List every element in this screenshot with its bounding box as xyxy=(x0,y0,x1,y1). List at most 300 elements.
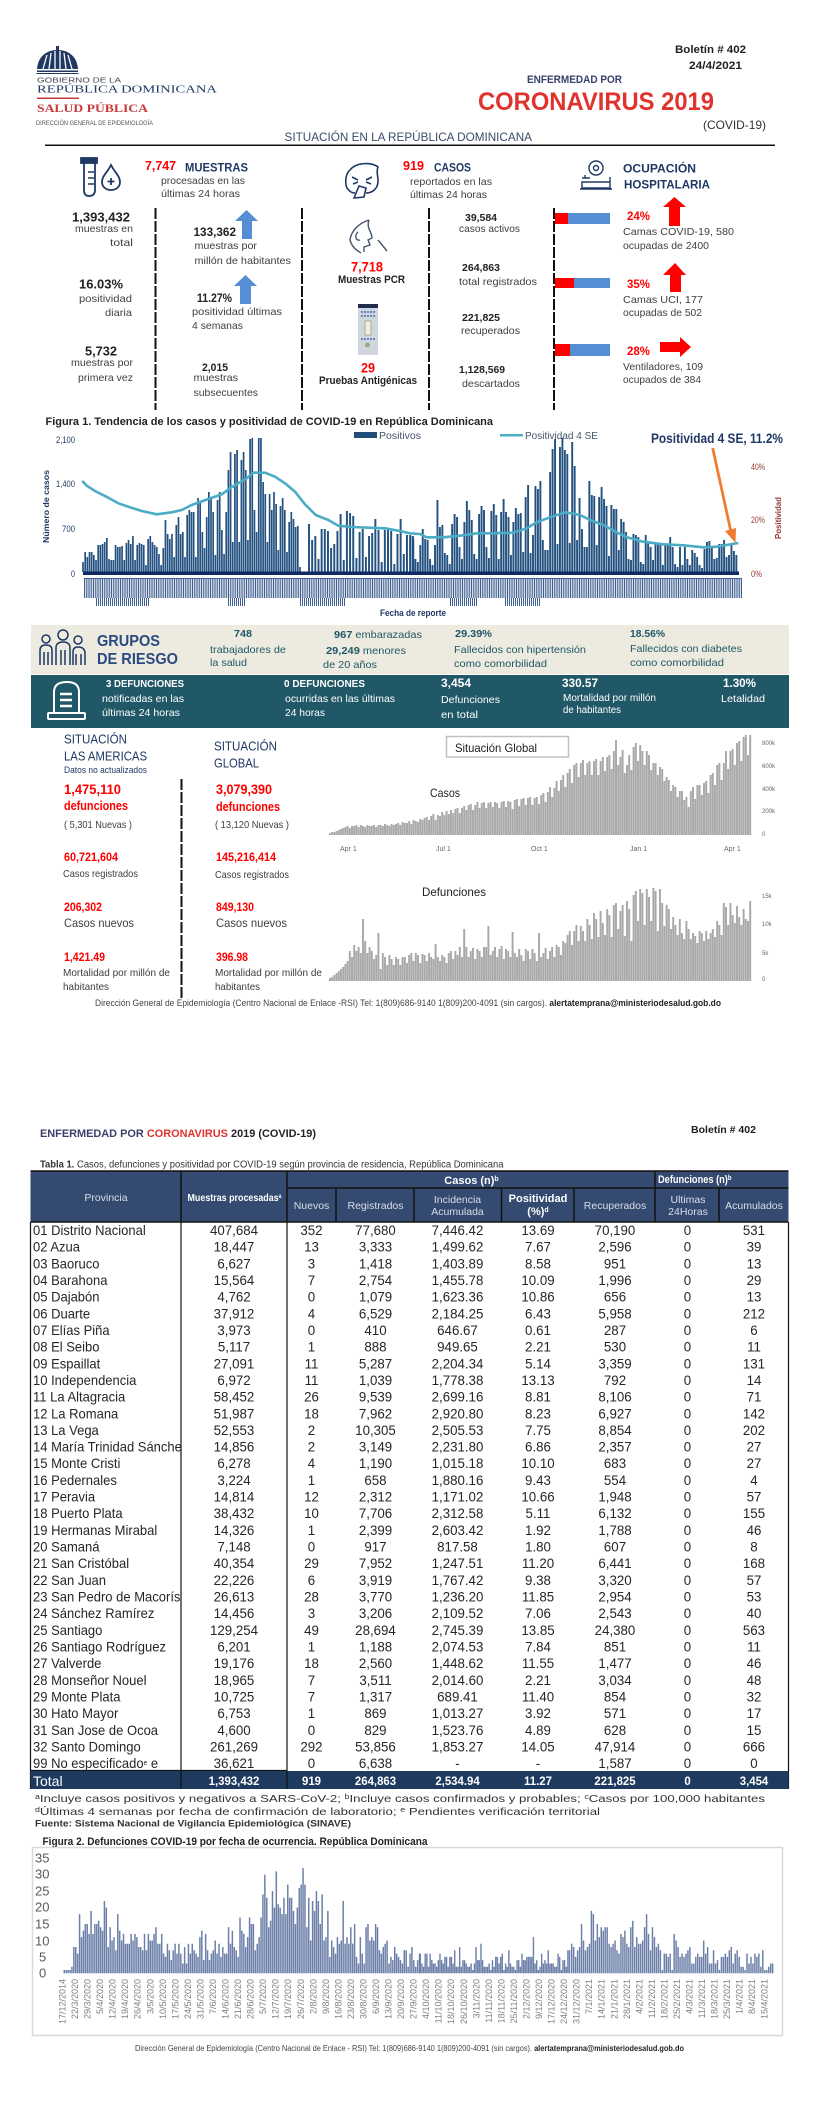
y axis labels: 5k xyxy=(762,951,769,957)
row: 20 Samaná: 0 xyxy=(308,1539,316,1555)
row: 31 San Jose de Ocoa: 4,600 xyxy=(217,1722,251,1738)
row: 99 No especificado: 1,587 xyxy=(598,1756,632,1771)
x axis dates: 11/10/2020 xyxy=(434,1979,444,2023)
row: 16 Pedernales: 16 Pedernales xyxy=(33,1472,117,1488)
count: muestras: 7,747 xyxy=(145,158,176,173)
stat: hipertensión: como comorbilidad xyxy=(454,658,547,670)
icon: test tube and drop xyxy=(81,158,120,196)
x axis dates: 25/11/2020 xyxy=(509,1979,519,2023)
row: 25 Santiago: 129,254 xyxy=(210,1622,258,1638)
footnote line 2: Pendientes verificación territorial xyxy=(405,1806,600,1818)
row: 31 San Jose de Ocoa: 31 San Jose de Ocoa xyxy=(33,1722,159,1738)
row: 30 Hato Mayor xyxy=(33,1706,761,1721)
row: 14 María Trinidad Sánchez: 2 xyxy=(308,1439,315,1455)
row: 19 Hermanas Mirabal: 0 xyxy=(684,1523,692,1538)
row: 22 San Juan: 3,320 xyxy=(598,1573,632,1588)
row: 15 Monte Cristi: 15 Monte Cristi xyxy=(33,1456,120,1471)
stat: embarazadas y menores: de 20 años xyxy=(323,659,377,671)
row: 19 Hermanas Mirabal: 2,603.42 xyxy=(432,1523,483,1538)
row: 23 San Pedro de Macorís: 0 xyxy=(684,1589,692,1605)
value: 28%: 28% xyxy=(627,344,650,358)
icon: blue up arrow xyxy=(234,275,257,304)
row: 23 San Pedro de Macorís: 3,770 xyxy=(359,1589,393,1605)
label: 4 semanas: 4 semanas xyxy=(192,320,243,332)
row: 20 Samaná: 917 xyxy=(364,1539,387,1555)
right axis title: Positividad xyxy=(774,497,783,539)
row: 99 No especificado: - xyxy=(455,1756,460,1771)
row: 25 Santiago: 0 xyxy=(684,1622,692,1638)
row: 03 Baoruco: 951 xyxy=(604,1256,626,1271)
row: 09 Espaillat: 5,287 xyxy=(359,1356,392,1371)
x axis dates: 17/12/2014 xyxy=(58,1979,68,2024)
row: 03 Baoruco: 6,627 xyxy=(217,1256,251,1271)
row: 05 Dajabón xyxy=(33,1289,761,1305)
row: 04 Barahona: 29 xyxy=(747,1273,761,1288)
y axis labels: 0 xyxy=(39,1966,46,1980)
y axis labels: 10 xyxy=(35,1934,49,1948)
row: 32 Santo Domingo: 32 Santo Domingo xyxy=(33,1739,141,1755)
row: 04 Barahona: 1,455.78 xyxy=(432,1273,483,1288)
header: acumulados: Acumulados xyxy=(725,1200,783,1212)
row: 06 Duarte: 6.43 xyxy=(525,1306,551,1321)
row: total: 0 xyxy=(684,1775,691,1788)
row: 23 San Pedro de Macorís xyxy=(33,1589,761,1605)
label: descartados: descartados xyxy=(462,378,520,390)
row: 04 Barahona: 2,754 xyxy=(359,1273,393,1288)
stat: diabetes xyxy=(630,628,742,669)
row: total: 919 xyxy=(302,1775,321,1788)
row: 15 Monte Cristi: 0 xyxy=(684,1456,692,1471)
left axis labels xyxy=(56,435,75,579)
y axis labels xyxy=(762,894,773,983)
y axis labels: 15k xyxy=(762,894,773,900)
row: 26 Santiago Rodríguez: 6,201 xyxy=(217,1639,251,1655)
header: últimas: Ultimas xyxy=(670,1194,706,1206)
stat: notificadas: últimas 24 horas xyxy=(102,707,180,719)
row: 07 Elías Piña: 0 xyxy=(684,1323,692,1338)
date axis: report dates xyxy=(84,578,742,602)
right axis labels: 40% xyxy=(751,462,765,472)
x axis dates: 9/12/2020 xyxy=(534,1979,544,2019)
stat: hipertensión: Fallecidos con hipertensión xyxy=(454,644,586,656)
row: 31 San Jose de Ocoa: 0 xyxy=(308,1722,316,1738)
row: 09 Espaillat xyxy=(33,1356,765,1371)
row: 22 San Juan: 1,767.42 xyxy=(432,1573,483,1588)
header: acumulada: Acumulada xyxy=(431,1206,484,1218)
row: 29 Monte Plata xyxy=(33,1689,761,1705)
row: 21 San Cristóbal: 11.20 xyxy=(522,1556,555,1571)
row: 07 Elías Piña: 07 Elías Piña xyxy=(33,1323,110,1338)
row: 32 Santo Domingo: 47,914 xyxy=(595,1739,636,1755)
row: 21 San Cristóbal: 40,354 xyxy=(214,1556,255,1571)
row: 15 Monte Cristi: 683 xyxy=(604,1456,626,1471)
heading: casos: CASOS xyxy=(434,160,471,174)
label: diaria: diaria xyxy=(105,307,132,319)
label: defunciones: Defunciones xyxy=(422,885,486,899)
row: 04 Barahona: 1,996 xyxy=(598,1273,632,1288)
row: 30 Hato Mayor: 1,013.27 xyxy=(432,1706,483,1721)
label: muestras por: muestras por xyxy=(71,357,134,369)
figure 2 title: Figura 2. Defunciones COVID-19 por fecha de ocurrencia. República Dominicana xyxy=(42,1836,428,1848)
y axis labels: 30 xyxy=(35,1866,49,1882)
row: 12 La Romana: 7,962 xyxy=(359,1406,392,1421)
x axis dates: 10/5/2020 xyxy=(158,1979,168,2019)
row: 10 Independencia: 0 xyxy=(684,1373,692,1388)
row: 18 Puerto Plata: 0 xyxy=(684,1506,692,1521)
label: ocupados 384: ocupados de 384 xyxy=(623,374,701,386)
row: 23 San Pedro de Macorís: 1,236.20 xyxy=(432,1589,484,1605)
row: 14 María Trinidad Sánchez: 3,149 xyxy=(359,1439,392,1455)
row: 32 Santo Domingo: 261,269 xyxy=(210,1739,258,1755)
row: 15 Monte Cristi: 6,278 xyxy=(217,1456,251,1471)
x axis dates: 2/8/2020 xyxy=(308,1979,318,2014)
row: 16 Pedernales: 658 xyxy=(364,1473,387,1488)
row: 29 Monte Plata: 32 xyxy=(747,1689,761,1705)
row: 99 No especificado: 0 xyxy=(308,1756,316,1771)
row: 10 Independencia: 11 xyxy=(305,1373,318,1388)
stat: total: 1,393,432 xyxy=(72,210,130,224)
row: 31 San Jose de Ocoa: 0 xyxy=(684,1722,692,1738)
stat: embarazadas y menores: 29,249 menores xyxy=(326,645,406,657)
label: ocupadas 502: ocupadas de 502 xyxy=(623,307,702,319)
row: 14 María Trinidad Sánchez: 14 María Trinidad Sánche xyxy=(33,1439,182,1455)
x axis labels: Jan 1 xyxy=(630,846,647,853)
chart: figure 2 deaths by date xyxy=(32,1848,782,2036)
x axis dates: 18/2/2021 xyxy=(659,1979,669,2019)
row: 07 Elías Piña: 6 xyxy=(750,1323,758,1338)
bulletin number: Boletín # 402 xyxy=(675,44,746,56)
left axis title: Número de casos xyxy=(41,470,51,543)
row: 14 María Trinidad Sánchez xyxy=(33,1439,761,1455)
row: 24 Sánchez Ramírez: 7.06 xyxy=(525,1606,551,1621)
row: 07 Elías Piña: 646.67 xyxy=(437,1323,478,1338)
row: 23 San Pedro de Macorís: 53 xyxy=(747,1589,761,1605)
row: 28 Monseñor Nouel: 0 xyxy=(684,1672,692,1688)
row: 09 Espaillat: 5.14 xyxy=(525,1356,551,1371)
row: 25 Santiago: 13.85 xyxy=(521,1622,555,1638)
row: 27 Valverde: 18 xyxy=(304,1656,319,1671)
row: 27 Valverde: 0 xyxy=(684,1656,692,1671)
row: 30 Hato Mayor: 1 xyxy=(308,1706,315,1721)
row: 17 Peravia: 1,171.02 xyxy=(432,1489,483,1505)
row: 25 Santiago: 28,694 xyxy=(355,1622,396,1638)
callout: positividad 4 SE: Positividad 4 SE, 11.2% xyxy=(651,431,783,446)
stat: ocurridas xyxy=(284,678,395,719)
row: 27 Valverde: 27 Valverde xyxy=(33,1656,101,1671)
row: 31 San Jose de Ocoa: 829 xyxy=(364,1722,387,1738)
chart: global cases xyxy=(330,735,776,853)
row: 25 Santiago xyxy=(33,1622,765,1638)
row: 11 La Altagracia: 26 xyxy=(304,1389,319,1405)
icon: red up arrow xyxy=(663,263,686,292)
row: 24 Sánchez Ramírez: 2,109.52 xyxy=(432,1606,483,1621)
row: 13 La Vega: 202 xyxy=(743,1423,765,1438)
row: 26 Santiago Rodríguez: 7.84 xyxy=(525,1639,551,1655)
stat: casos registrados: 145,216,414 xyxy=(216,850,276,864)
x axis dates: 2/12/2020 xyxy=(522,1979,532,2019)
row: total: Total xyxy=(33,1773,63,1789)
x axis dates: 24/5/2020 xyxy=(183,1979,193,2019)
stat: recuperados: 221,825 xyxy=(462,312,500,324)
row: 13 La Vega: 13 La Vega xyxy=(33,1422,99,1438)
text: últimas 24 horas: últimas 24 horas xyxy=(161,188,240,200)
footnote line 1: c xyxy=(584,1794,589,1801)
x axis dates: 28/1/2021 xyxy=(622,1979,632,2019)
row: 99 No especificado: 0 xyxy=(750,1756,758,1771)
row: 08 El Seibo: 5,117 xyxy=(218,1339,250,1355)
row: 05 Dajabón: 1,623.36 xyxy=(432,1289,483,1305)
header: provincia: Provincia xyxy=(84,1192,128,1204)
row: 26 Santiago Rodríguez xyxy=(33,1639,761,1655)
row: 12 La Romana: 6,927 xyxy=(598,1406,632,1421)
row: 06 Duarte: 212 xyxy=(743,1306,765,1321)
row: 08 El Seibo: 11 xyxy=(747,1339,761,1355)
row: 16 Pedernales xyxy=(33,1472,758,1488)
row: 02 Azua: 39 xyxy=(747,1239,761,1255)
row: 19 Hermanas Mirabal: 2,399 xyxy=(359,1523,392,1538)
row: 26 Santiago Rodríguez: 26 Santiago Rodríguez xyxy=(33,1639,166,1655)
header: recuperados: Recuperados xyxy=(584,1200,646,1212)
panel: muestras xyxy=(71,158,291,399)
legend: positivos xyxy=(354,430,421,442)
row: 28 Monseñor Nouel xyxy=(33,1672,761,1688)
row: 99 No especificado: 99 No especificado xyxy=(33,1756,144,1771)
stat: mortalidad: 330.57 xyxy=(562,676,598,690)
row: 08 El Seibo: 08 El Seibo xyxy=(33,1339,100,1355)
row: 32 Santo Domingo: 0 xyxy=(684,1739,692,1755)
row: 13 La Vega xyxy=(33,1422,765,1438)
row: 20 Samaná xyxy=(33,1539,758,1555)
row: 15 Monte Cristi: 1,015.18 xyxy=(432,1456,483,1471)
row: 32 Santo Domingo: 53,856 xyxy=(355,1739,396,1755)
row: 15 Monte Cristi: 27 xyxy=(747,1456,761,1471)
stat: defunciones: 1,475,110 xyxy=(64,781,121,797)
row: 01 Distrito Nacional: 70,190 xyxy=(595,1223,636,1238)
row: 27 Valverde: 1,477 xyxy=(598,1656,632,1671)
stat: mortalidad: de habitantes xyxy=(563,705,621,716)
row: total: 2,534.94 xyxy=(435,1775,480,1788)
row: 21 San Cristóbal: 168 xyxy=(743,1556,765,1571)
stat: hipertensión xyxy=(454,628,586,670)
x axis dates: 15/4/2021 xyxy=(760,1979,770,2019)
row: 08 El Seibo: 2.21 xyxy=(525,1339,551,1355)
x axis dates: 5/7/2020 xyxy=(258,1979,268,2014)
left axis labels: 2,100 xyxy=(56,435,75,445)
stat: subsecuentes: 2,015 xyxy=(202,362,228,374)
row: 25 Santiago: 2,745.39 xyxy=(432,1622,483,1638)
row: 03 Baoruco: 3 xyxy=(308,1256,315,1271)
stat: ocurridas: 24 horas xyxy=(285,707,325,719)
bars: daily deaths xyxy=(64,1868,773,1973)
row: 11 La Altagracia xyxy=(33,1389,761,1405)
panel: casos xyxy=(319,158,537,390)
x axis dates: 22/3/2020 xyxy=(70,1979,80,2019)
x axis dates: 17/12/2020 xyxy=(547,1979,557,2024)
row: 12 La Romana xyxy=(33,1406,765,1421)
count: casos: 919 xyxy=(403,158,424,173)
x axis dates: 7/6/2020 xyxy=(208,1979,218,2014)
row: 13 La Vega: 2 xyxy=(308,1423,315,1438)
stat: casos nuevos: 849,130 xyxy=(216,900,254,914)
row: 04 Barahona: 7 xyxy=(308,1273,315,1288)
label: ocupadas 2400: ocupadas de 2400 xyxy=(623,240,709,252)
row: 13 La Vega: 10,305 xyxy=(355,1423,396,1438)
row: 29 Monte Plata: 0 xyxy=(684,1689,692,1705)
stat: total: en total xyxy=(441,709,478,721)
row: 17 Peravia: 12 xyxy=(304,1489,319,1505)
stat: diabetes: como comorbilidad xyxy=(630,657,724,669)
icon: people xyxy=(40,630,85,665)
row: 01 Distrito Nacional: 0 xyxy=(684,1223,692,1238)
row: 01 Distrito Nacional: 01 Distrito Nacional xyxy=(33,1223,146,1238)
header: positividad: Positividad xyxy=(509,1193,567,1205)
row: 16 Pedernales: 4 xyxy=(750,1473,758,1488)
row: 25 Santiago: 49 xyxy=(304,1622,319,1638)
row: 31 San Jose de Ocoa: 1,523.76 xyxy=(432,1722,483,1738)
icon: red up arrow xyxy=(663,197,686,226)
row: 14 María Trinidad Sánchez: 0 xyxy=(684,1439,692,1455)
x axis dates: 6/9/2020 xyxy=(371,1979,381,2014)
row: 08 El Seibo: 888 xyxy=(364,1339,387,1355)
panel: situación las américas xyxy=(63,732,170,993)
count: antigen: 29 xyxy=(361,360,375,376)
row: 29 Monte Plata: 689.41 xyxy=(437,1689,478,1705)
footer: Dirección General de Epidemiología (Centro Nacional de Enlace - RSI) Tel: 1(809)686-9140 1(809)200-4091 (sin cargos). alertatemprana@ministeriodesalud.gob.do xyxy=(135,2044,684,2053)
row: 24 Sánchez Ramírez: 0 xyxy=(684,1606,692,1621)
stat: embarazadas y menores: 967 embarazadas xyxy=(334,629,422,641)
y axis labels: 0 xyxy=(762,977,766,983)
row: 29 Monte Plata: 854 xyxy=(604,1689,626,1705)
row: 28 Monseñor Nouel: 3,034 xyxy=(598,1672,632,1688)
row: 02 Azua: 02 Azua xyxy=(33,1239,80,1255)
row: 02 Azua: 18,447 xyxy=(214,1239,254,1255)
row: 04 Barahona: 0 xyxy=(684,1273,692,1288)
row: 24 Sánchez Ramírez xyxy=(33,1606,762,1621)
stat: letalidad: 1.30% xyxy=(723,676,756,690)
label: defunciones: defunciones xyxy=(216,799,280,814)
row: 16 Pedernales: 9.43 xyxy=(525,1473,551,1488)
row: 17 Peravia: 57 xyxy=(747,1489,761,1505)
row: 23 San Pedro de Macorís: 23 San Pedro de Macorís xyxy=(33,1589,181,1605)
row: 29 Monte Plata: 11.40 xyxy=(522,1689,555,1705)
label: habitantes: habitantes xyxy=(215,981,260,993)
row: 28 Monseñor Nouel: 3,511 xyxy=(359,1672,392,1688)
x axis dates: 30/8/2020 xyxy=(358,1979,368,2019)
row: 26 Santiago Rodríguez: 1,188 xyxy=(359,1639,392,1655)
row: 31 San Jose de Ocoa xyxy=(33,1722,762,1738)
count: PCR: 7,718 xyxy=(351,258,383,274)
row: 04 Barahona: 10.09 xyxy=(521,1273,555,1288)
stat: mortalidad: 1,421.49 xyxy=(64,950,105,964)
row: 02 Azua xyxy=(33,1239,761,1255)
header: registrados: Registrados xyxy=(347,1200,404,1212)
logo: Salud Pública xyxy=(36,46,218,127)
logo red rule xyxy=(37,98,79,99)
row: 27 Valverde: 11.55 xyxy=(522,1656,555,1671)
stat: mortalidad xyxy=(562,676,656,716)
row: 02 Azua: 1,499.62 xyxy=(432,1239,483,1255)
row: 16 Pedernales: 1,880.16 xyxy=(432,1473,483,1488)
row: 13 La Vega: 8,854 xyxy=(598,1423,632,1438)
row: 20 Samaná: 0 xyxy=(684,1539,692,1555)
row: 10 Independencia: 6,972 xyxy=(217,1373,251,1388)
label: subsecuentes: subsecuentes xyxy=(194,387,258,399)
icon: red right arrow xyxy=(660,337,691,357)
row: 31 San Jose de Ocoa: 15 xyxy=(747,1722,762,1738)
row: 29 Monte Plata: 1,317 xyxy=(359,1689,392,1705)
row: 18 Puerto Plata: 7,706 xyxy=(359,1506,392,1521)
header: incidencia: Incidencia xyxy=(434,1194,481,1206)
row: 03 Baoruco: 8.58 xyxy=(525,1256,551,1271)
row: 10 Independencia: 13.13 xyxy=(521,1373,555,1388)
x axis dates: 18/3/2021 xyxy=(710,1979,720,2019)
row: 13 La Vega: 7.75 xyxy=(525,1423,551,1438)
row: 27 Valverde: 2,560 xyxy=(359,1656,393,1671)
row: 16 Pedernales: 554 xyxy=(604,1473,626,1488)
y axis labels: 25 xyxy=(35,1884,49,1898)
bulletin number and date xyxy=(675,44,746,72)
stat: trabajadores xyxy=(210,628,286,669)
footnote line 1: b xyxy=(345,1794,350,1801)
row: 07 Elías Piña: 0.61 xyxy=(525,1323,551,1338)
bulletin number: Boletín # 402 xyxy=(691,1124,756,1136)
x axis dates: 13/9/2020 xyxy=(384,1979,394,2019)
row: total: 221,825 xyxy=(594,1775,636,1788)
row: 99 No especificado: 36,621 xyxy=(214,1756,254,1771)
icon: antigen test xyxy=(358,304,378,355)
row: 19 Hermanas Mirabal: 1,788 xyxy=(598,1523,632,1538)
row: 20 Samaná: 607 xyxy=(604,1539,626,1555)
row: 99 No especificado: 6,638 xyxy=(359,1756,392,1771)
row: 01 Distrito Nacional xyxy=(33,1223,765,1238)
y axis labels: 400k xyxy=(762,787,776,793)
row: 19 Hermanas Mirabal xyxy=(33,1522,761,1538)
row: 11 La Altagracia: 2,699.16 xyxy=(432,1389,483,1405)
stat: total xyxy=(441,676,500,721)
x axis dates: 26/4/2020 xyxy=(133,1979,143,2019)
row: 26 Santiago Rodríguez: 0 xyxy=(684,1639,692,1655)
title xyxy=(478,74,766,132)
row: 99 No especificado xyxy=(33,1756,758,1771)
row: 18 Puerto Plata: 6,132 xyxy=(598,1506,632,1521)
x axis labels: Jul 1 xyxy=(436,846,451,853)
value: 35%: 35% xyxy=(627,277,650,291)
footnote line 2: e xyxy=(400,1807,405,1814)
row: 32 Santo Domingo: 666 xyxy=(743,1739,765,1755)
row: 99 No especificado: - xyxy=(536,1756,540,1771)
label: recuperados: recuperados xyxy=(461,325,520,337)
row: 31 San Jose de Ocoa: 628 xyxy=(604,1722,626,1738)
stat: casos activos: 39,584 xyxy=(465,212,497,224)
label: muestras: muestras xyxy=(194,372,238,384)
row: 21 San Cristóbal: 1,247.51 xyxy=(432,1556,483,1571)
value: 24%: 24% xyxy=(627,209,650,223)
y axis labels: 0 xyxy=(762,832,766,838)
row: 28 Monseñor Nouel: 28 Monseñor Nouel xyxy=(33,1672,146,1688)
legend box: situación global xyxy=(446,736,568,757)
row: 99 No especificado: 0 xyxy=(684,1756,692,1771)
row: 27 Valverde xyxy=(33,1656,761,1671)
row: 27 Valverde: 1,448.62 xyxy=(432,1656,483,1671)
row: 11 La Altagracia: 9,539 xyxy=(359,1389,392,1405)
panel: defunciones xyxy=(31,675,789,728)
label: nuevas: ( 13,120 Nuevas ) xyxy=(215,819,289,831)
row: 05 Dajabón: 13 xyxy=(747,1289,761,1305)
x axis dates: 14/6/2020 xyxy=(220,1979,230,2019)
stat: casos registrados: 60,721,604 xyxy=(64,850,118,864)
label: millón de habitantes: millón de habitantes xyxy=(194,255,291,267)
row: 18 Puerto Plata: 10 xyxy=(304,1506,319,1521)
